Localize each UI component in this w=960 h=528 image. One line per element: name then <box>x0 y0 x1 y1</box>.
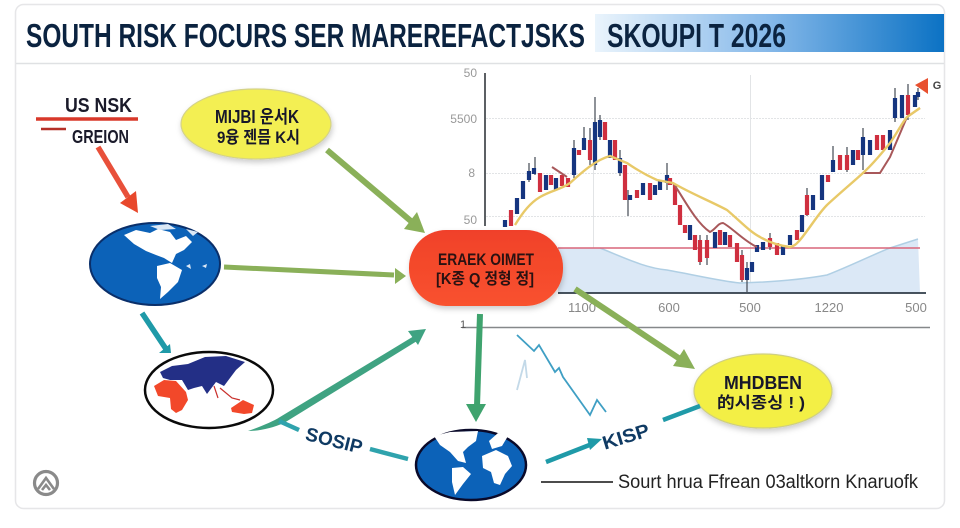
arrow: olive to risk node <box>327 150 425 233</box>
connector: teal to yellow <box>663 406 700 420</box>
y axis labels: 5500 <box>450 112 477 126</box>
chart: candlestick price chart <box>450 66 941 315</box>
globe: asia and africa map <box>145 352 273 428</box>
moving average: yellow <box>515 108 920 247</box>
label: us risk: GREION <box>72 127 129 147</box>
x axis labels: 1100 <box>568 300 596 315</box>
y axis labels: 50 <box>464 66 477 80</box>
title banner: SKOUPI T 2026 <box>607 17 786 54</box>
node: yellow top <box>181 89 331 159</box>
label: us risk <box>36 95 138 147</box>
arrow: green rising <box>248 329 426 431</box>
area curve line <box>600 239 918 283</box>
globe: world <box>416 430 526 500</box>
footnote leader <box>541 481 613 483</box>
chart grid <box>486 75 925 293</box>
arrow: olive to lower yellow <box>575 289 695 369</box>
title: SOUTH RISK FOCURS SER MAREREFACTJSKS <box>26 17 585 54</box>
arrow: olive to centre <box>224 267 406 284</box>
label: us risk: US NSK <box>65 95 132 117</box>
node: yellow top: MIJBI 운서K <box>215 107 299 127</box>
node: central risk <box>409 230 563 306</box>
arrow: teal to kisp <box>546 438 602 462</box>
y axis labels: 50 <box>464 213 477 227</box>
node: yellow lower: MHDBEN <box>724 373 802 393</box>
reference line <box>558 247 920 249</box>
y axis <box>484 73 486 226</box>
x axis labels: 600 <box>658 300 680 315</box>
y axis labels: 8 <box>468 166 475 180</box>
icon: logo <box>34 472 58 494</box>
node: yellow top: 9융 젠믐 K시 <box>217 128 300 147</box>
x axis labels <box>568 300 927 315</box>
moving average: brown <box>552 108 920 247</box>
node: central risk: ERAEK OIMET <box>438 250 535 269</box>
arrow: red <box>98 147 138 213</box>
area under curve <box>558 239 920 293</box>
x axis <box>558 292 926 294</box>
arrow: teal to asia map <box>142 313 171 353</box>
node: yellow lower <box>694 354 832 428</box>
candle wicks <box>529 84 918 292</box>
blue candles <box>505 92 918 280</box>
trend arrow <box>915 78 928 94</box>
trend label: G <box>933 80 941 92</box>
node: central risk: [K종 Q 정형 정] <box>436 270 534 288</box>
y axis labels <box>450 66 477 227</box>
x axis labels: 500 <box>905 300 927 315</box>
title banner <box>595 14 944 54</box>
connector: sosip: SOSIP <box>303 424 365 459</box>
label: kisp: KISP <box>600 420 652 455</box>
line chart: falling sketch <box>517 335 606 415</box>
x axis labels: 1220 <box>815 300 843 315</box>
footnote: Sourt hrua Ffrean 03altkorn Knaruofk <box>618 472 918 493</box>
arrow: green down <box>466 314 486 422</box>
node: yellow lower: 的시종싱 ! ) <box>717 394 805 412</box>
red candles <box>511 95 908 280</box>
connector: sosip <box>279 421 408 459</box>
x axis labels: 500 <box>739 300 761 315</box>
secondary axis: 1 <box>460 319 466 331</box>
globe: americas <box>90 223 220 306</box>
